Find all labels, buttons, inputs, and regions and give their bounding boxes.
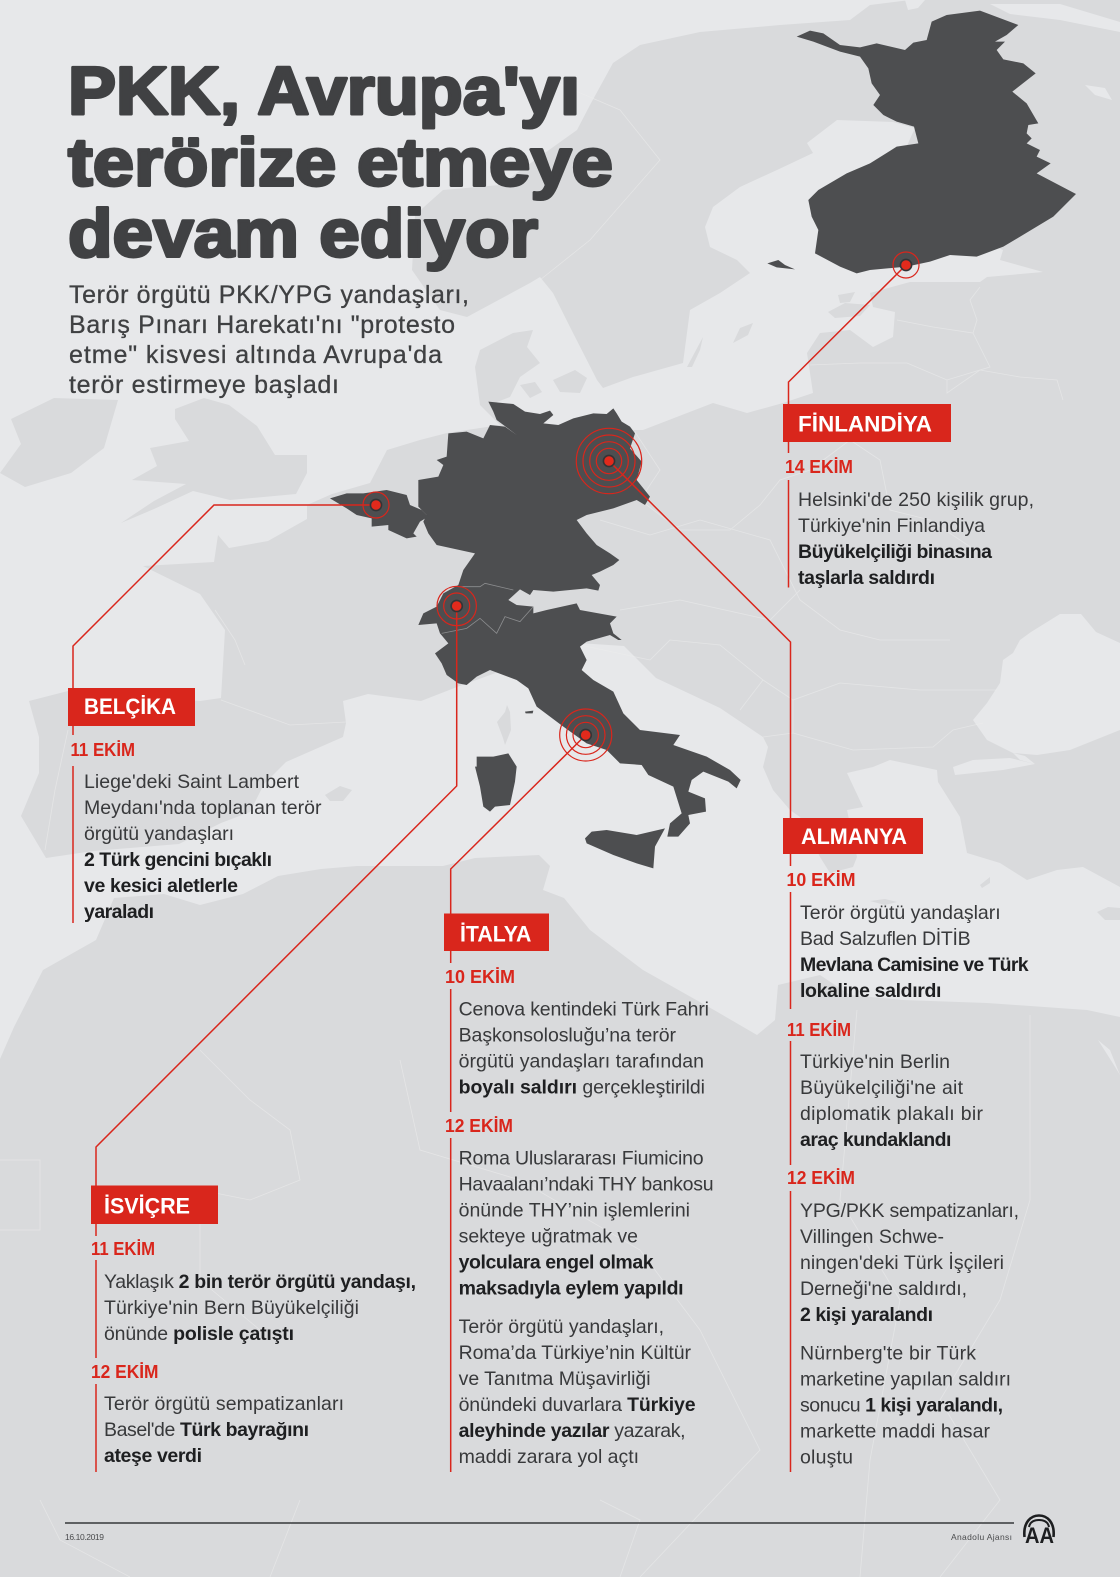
text block: Nürnberg: Nürnberg'te bir Türk: [800, 1342, 976, 1364]
panel: İtalya: [444, 709, 714, 1472]
text block: Bad Salzuflen: Mevlana Camisine ve Türk: [800, 954, 1029, 976]
text block: Finlandiya: taşlarla saldırdı: [798, 567, 935, 589]
text block: Roma Fiumicino: [459, 1148, 714, 1300]
marker: Liege: [363, 492, 389, 518]
text block: Nürnberg: sonucu 1 kişi yaralandı,: [800, 1394, 1003, 1416]
dark country: Belgium: [330, 490, 428, 538]
marker: Helsinki: [893, 252, 919, 278]
title: terörize etmeye: [68, 124, 613, 200]
text block: Cenova: Cenova kentindeki Türk Fahri: [459, 998, 709, 1020]
connector line: Helsinki: [788, 265, 906, 588]
text block: Villingen: YPG/PKK sempatizanları,: [800, 1200, 1019, 1222]
text block: Roma Kültür Müşavirliği: ve Tanıtma Müşavirliği: [459, 1368, 651, 1390]
text block: Bern: Yaklaşık 2 bin terör örgütü yandaşı,: [104, 1271, 416, 1293]
map background: light fjords and seas over land: [905, 0, 1120, 1075]
text block: Basel: Basel'de Türk bayrağını: [104, 1419, 309, 1441]
text block: Bad Salzuflen: [800, 902, 1029, 1002]
label: Belçika: [68, 688, 195, 726]
text block: Finlandiya: Helsinki'de 250 kişilik grup,: [798, 489, 1034, 511]
text block: Berlin: [800, 1051, 984, 1151]
date: 11 Ekim: 11 EKİM: [787, 1020, 851, 1040]
text block: Nürnberg: [800, 1342, 1011, 1468]
text block: Basel: [104, 1393, 344, 1467]
text block: Roma Kültür Müşavirliği: Terör örgütü yandaşları,: [459, 1316, 664, 1338]
label: İsviçre: İSVİÇRE: [104, 1194, 190, 1219]
text block: Finlandiya: Büyükelçiliği binasına: [798, 541, 992, 563]
text block: Belçika: 2 Türk gencini bıçaklı: [84, 849, 272, 871]
text block: Finlandiya: Türkiye'nin Finlandiya: [798, 515, 985, 537]
date: 10 Ekim: 10 EKİM: [786, 870, 856, 890]
text block: Roma Fiumicino: Roma Uluslararası Fiumicino: [459, 1148, 704, 1170]
text block: Roma Kültür Müşavirliği: önündeki duvarlara Türkiye: [459, 1394, 696, 1416]
text block: Nürnberg: marketine yapılan saldırı: [800, 1368, 1011, 1390]
text block: Belçika: Liege'deki Saint Lambert: [84, 771, 300, 793]
dark country: Finland: [767, 11, 1076, 273]
label: Finlandiya: [783, 404, 951, 442]
text block: Belçika: ve kesici aletlerle: [84, 875, 238, 897]
date: 14 Ekim: 14 EKİM: [785, 457, 853, 477]
footer date: 16.10.2019: [65, 1532, 104, 1542]
panel: Finlandiya: [783, 252, 1034, 589]
marker: Bern: [437, 586, 476, 626]
connector line: Roma: [451, 735, 586, 1472]
text block: Belçika: örgütü yandaşları: [84, 823, 234, 845]
subtitle: Terör örgütü PKK/YPG yandaşları,: [69, 281, 469, 309]
text block: Belçika: yaraladı: [84, 901, 154, 923]
text block: Cenova: örgütü yandaşları tarafından: [459, 1050, 704, 1072]
text block: Villingen: ningen'deki Türk İşçileri: [800, 1251, 1004, 1274]
text block: Roma Fiumicino: maksadıyla eylem yapıldı: [459, 1278, 684, 1300]
text block: Basel: ateşe verdi: [104, 1445, 202, 1467]
subtitle: [69, 281, 469, 399]
text block: Roma Fiumicino: sekteye uğratmak ve: [459, 1226, 638, 1248]
connector line: Liege: [73, 505, 376, 923]
text block: Villingen: Derneği'ne saldırdı,: [800, 1278, 967, 1300]
panel: İsviçre: [91, 586, 476, 1472]
subtitle: etme" kisvesi altında Avrupa'da: [69, 341, 442, 369]
text block: Berlin: diplomatik plakalı bir: [800, 1103, 984, 1125]
label: Finlandiya: FİNLANDİYA: [798, 412, 932, 437]
date: 10 Ekim: 10 EKİM: [445, 967, 515, 987]
text block: Roma Fiumicino: önünde THY’nin işlemlerini: [459, 1200, 690, 1222]
text block: Finlandiya: [798, 489, 1034, 589]
text block: Berlin: Türkiye'nin Berlin: [800, 1051, 950, 1073]
text block: Villingen: [800, 1200, 1019, 1326]
label: İtalya: [444, 914, 549, 951]
text block: Nürnberg: oluştu: [800, 1446, 853, 1468]
text block: Basel: Terör örgütü sempatizanları: [104, 1393, 344, 1415]
text block: Roma Kültür Müşavirliği: Roma’da Türkiye’nin Kültür: [459, 1342, 692, 1364]
title: devam ediyor: [68, 196, 538, 272]
label: Belçika: BELÇİKA: [84, 694, 176, 719]
text block: Bern: önünde polisle çatıştı: [104, 1323, 294, 1345]
label: İtalya: İTALYA: [460, 922, 531, 947]
date: 12 Ekim: 12 EKİM: [787, 1168, 855, 1188]
date: 12 Ekim: 12 EKİM: [445, 1116, 513, 1136]
text block: Roma Kültür Müşavirliği: [459, 1316, 696, 1468]
connector line: Berlin: [609, 461, 790, 1472]
date: 11 Ekim: 11 EKİM: [91, 1239, 155, 1259]
text block: Berlin: Büyükelçiliği'ne ait: [800, 1077, 964, 1099]
marker: Berlin: [576, 428, 642, 494]
text block: Berlin: araç kundaklandı: [800, 1129, 951, 1151]
text block: Nürnberg: markette maddi hasar: [800, 1420, 990, 1442]
label: Almanya: ALMANYA: [801, 824, 907, 849]
text block: Cenova: Başkonsolosluğu’na terör: [459, 1024, 676, 1046]
footer source: Anadolu Ajansı: [951, 1532, 1012, 1542]
text block: Bern: Türkiye'nin Bern Büyükelçiliği: [104, 1297, 359, 1319]
text block: Bern: [104, 1271, 416, 1345]
date: 12 Ekim: 12 EKİM: [91, 1362, 158, 1382]
dark country: Germany, Switzerland and Italy: [418, 402, 741, 868]
text block: Villingen: Villingen Schwe-: [800, 1226, 944, 1248]
footer rule: [65, 1522, 1014, 1524]
panel: Almanya: [576, 428, 1029, 1472]
subtitle: Barış Pınarı Harekatı'nı "protesto: [69, 311, 455, 339]
label: Almanya: [783, 818, 923, 854]
text block: Belçika: Meydanı'nda toplanan terör: [84, 797, 322, 819]
date: 11 Ekim: 11 EKİM: [70, 740, 135, 760]
text block: Roma Fiumicino: Havaalanı’ndaki THY bankosu: [459, 1174, 714, 1196]
text block: Roma Kültür Müşavirliği: maddi zarara yol açtı: [459, 1446, 639, 1468]
connector line: Bern: [96, 606, 457, 1472]
logo: Anadolu Ajansı: AA: [1025, 1523, 1054, 1548]
title: PKK, Avrupa'yı: [68, 53, 580, 129]
text block: Belçika: [84, 771, 322, 923]
text block: Bad Salzuflen: Terör örgütü yandaşları: [800, 902, 1001, 924]
subtitle: terör estirmeye başladı: [69, 371, 339, 399]
text block: Bad Salzuflen: lokaline saldırdı: [800, 980, 941, 1002]
text block: Villingen: 2 kişi yaralandı: [800, 1304, 933, 1326]
text block: Cenova: [459, 998, 709, 1098]
label: İsviçre: [91, 1186, 218, 1224]
title: [68, 53, 613, 272]
text block: Bad Salzuflen: Bad Salzuflen DİTİB: [800, 927, 971, 950]
text block: Roma Fiumicino: yolculara engel olmak: [459, 1252, 654, 1274]
marker: Roma: [560, 709, 612, 761]
text block: Cenova: boyalı saldırı gerçekleştirildi: [459, 1076, 705, 1098]
panel: Belçika: [68, 492, 389, 923]
text block: Roma Kültür Müşavirliği: aleyhinde yazılar yazarak,: [459, 1420, 686, 1442]
